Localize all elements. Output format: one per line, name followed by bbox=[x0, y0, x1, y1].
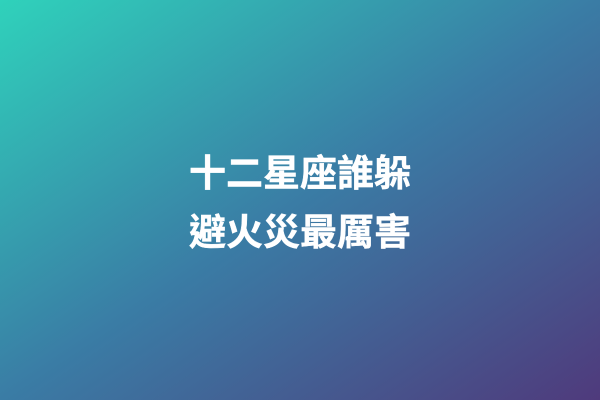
title bbox=[189, 153, 411, 253]
title line 2: 避火災最厲害 bbox=[189, 212, 411, 253]
title line 1: 十二星座誰躲 bbox=[189, 153, 411, 194]
